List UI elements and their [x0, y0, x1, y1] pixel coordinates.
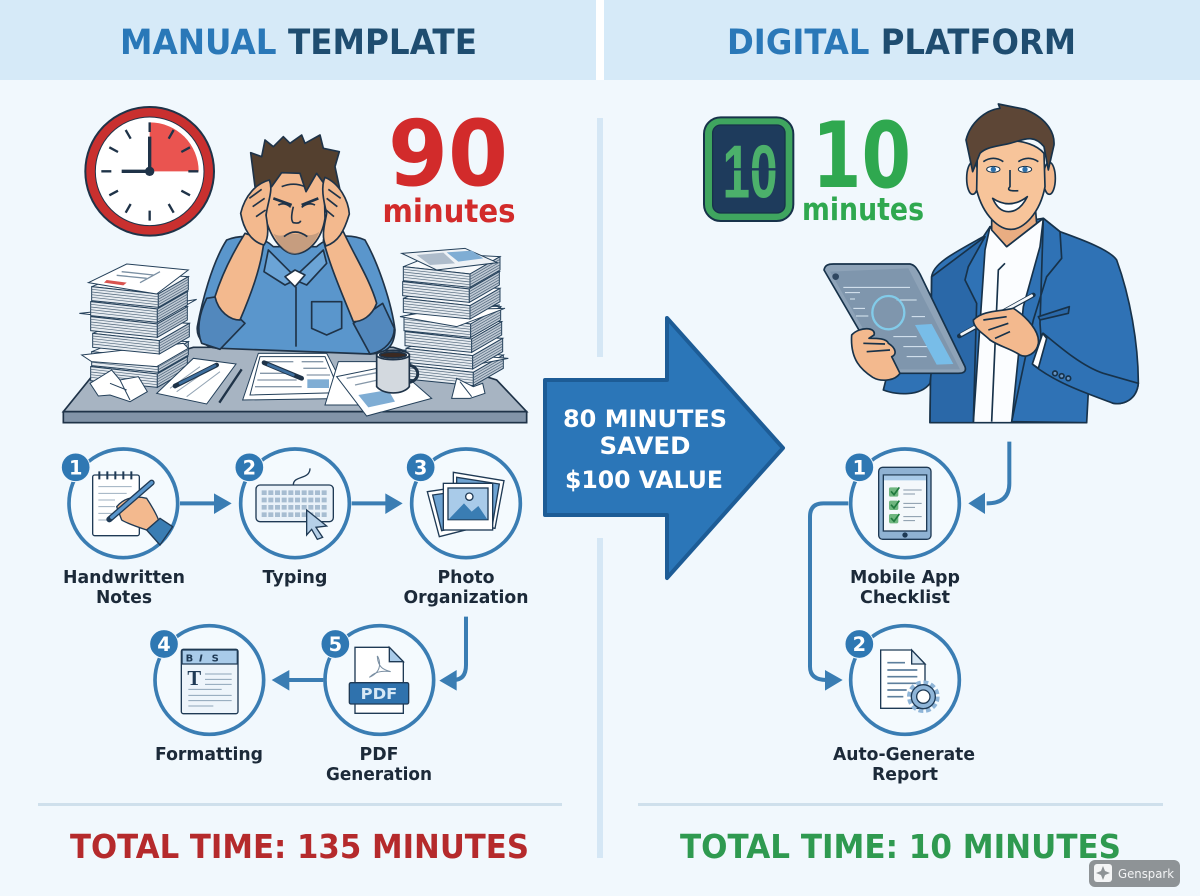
panel: manual scene	[63, 107, 527, 423]
step badges: 4	[157, 633, 171, 656]
face features	[273, 198, 318, 205]
step badges	[845, 453, 874, 658]
hair	[966, 104, 1054, 172]
icon: auto-generate report	[881, 650, 937, 711]
step badges: 3	[414, 456, 427, 479]
stat: 10 minutes: minutes	[802, 192, 924, 228]
right paper stack	[400, 248, 508, 386]
step labels: digital: Auto-Generate	[833, 745, 975, 765]
smiling man	[824, 104, 1138, 423]
icon: tablet checklist	[879, 467, 931, 539]
step badges	[61, 453, 435, 658]
step labels: manual: Generation	[326, 765, 432, 785]
step badges: 2	[853, 633, 866, 656]
stat: 10 minutes: 10	[812, 104, 911, 209]
panel: digital scene	[704, 104, 1138, 423]
sleeve right	[1033, 333, 1138, 404]
stat: 90 minutes: minutes	[382, 192, 516, 230]
total: manual: TOTAL TIME: 135 MINUTES	[70, 828, 529, 866]
step labels: manual: Organization	[404, 588, 528, 608]
process arrows	[810, 442, 1009, 691]
total: digital: TOTAL TIME: 10 MINUTES	[680, 828, 1121, 866]
central report	[243, 353, 350, 400]
stylus	[959, 295, 1033, 336]
hand holding stylus	[973, 308, 1038, 356]
step labels: manual: Formatting	[155, 745, 263, 765]
step labels: manual: PDF	[360, 745, 398, 765]
badge: genspark	[1089, 860, 1180, 887]
icon: formatting: I	[199, 654, 203, 665]
process: manual steps	[61, 449, 520, 734]
icon: pdf: PDF	[361, 686, 397, 703]
process: digital steps	[810, 442, 1009, 734]
sleeve left	[883, 353, 933, 394]
icon: digital timer	[704, 117, 793, 221]
central arrow	[545, 318, 783, 578]
icon: keyboard	[256, 468, 333, 539]
icon: formatting: B	[186, 654, 193, 665]
step badges: 1	[69, 456, 82, 479]
step labels: manual: Handwritten	[63, 568, 185, 588]
step labels: manual: Photo	[438, 568, 494, 588]
step badges: 5	[329, 633, 342, 656]
icon: photos	[427, 472, 504, 537]
callout: savings: $100 VALUE	[565, 466, 723, 494]
header band: digital platform	[604, 0, 1200, 80]
shirt	[973, 218, 1043, 423]
step labels: manual	[63, 568, 528, 785]
forearm left	[215, 233, 264, 320]
blue shirt	[197, 236, 395, 354]
callout: savings: SAVED	[600, 432, 690, 460]
icon: digital timer: 10	[722, 129, 777, 213]
lapels	[930, 237, 985, 423]
callout: savings	[563, 405, 727, 494]
icon: wall clock 90 minutes	[85, 107, 214, 236]
stressed man	[197, 135, 395, 354]
crumpled paper	[90, 370, 485, 402]
loose papers	[325, 362, 432, 416]
face features	[983, 158, 1038, 191]
tablet	[824, 264, 965, 373]
stat: 90 minutes: 90	[388, 102, 508, 207]
step labels: manual: Notes	[96, 588, 152, 608]
process arrows	[180, 493, 466, 691]
left paper stack	[79, 264, 197, 387]
neck	[992, 203, 1037, 247]
step badges: 1	[853, 456, 866, 479]
header band: manual template	[0, 0, 596, 80]
callout: savings: 80 MINUTES	[563, 405, 727, 433]
step labels: digital: Mobile App	[850, 568, 960, 588]
step badges: 2	[243, 456, 256, 479]
step circles	[851, 449, 959, 734]
icon: formatting	[181, 649, 238, 714]
icon: pdf	[349, 647, 409, 713]
head	[266, 169, 325, 254]
forearm right	[323, 232, 377, 322]
icon: formatting: S	[212, 654, 219, 665]
step labels: digital: Checklist	[860, 588, 950, 608]
heading: digital platform: DIGITAL PLATFORM	[727, 23, 1076, 63]
coffee mug	[377, 350, 418, 393]
step labels: digital	[833, 568, 975, 785]
desk	[63, 347, 527, 423]
heading: manual template: MANUAL TEMPLATE	[120, 23, 477, 63]
icon: formatting: T	[187, 668, 201, 690]
hair	[251, 135, 340, 192]
step labels: digital: Report	[872, 765, 938, 785]
badge: genspark: Genspark	[1118, 867, 1174, 881]
jacket	[930, 218, 1138, 423]
hand holding tablet	[852, 329, 900, 380]
step circles	[69, 449, 520, 734]
hands	[241, 180, 271, 245]
icon: handwritten notes	[93, 471, 173, 545]
notepad and pens	[157, 358, 242, 404]
step labels: manual: Typing	[262, 568, 328, 588]
ears and face	[967, 162, 979, 194]
